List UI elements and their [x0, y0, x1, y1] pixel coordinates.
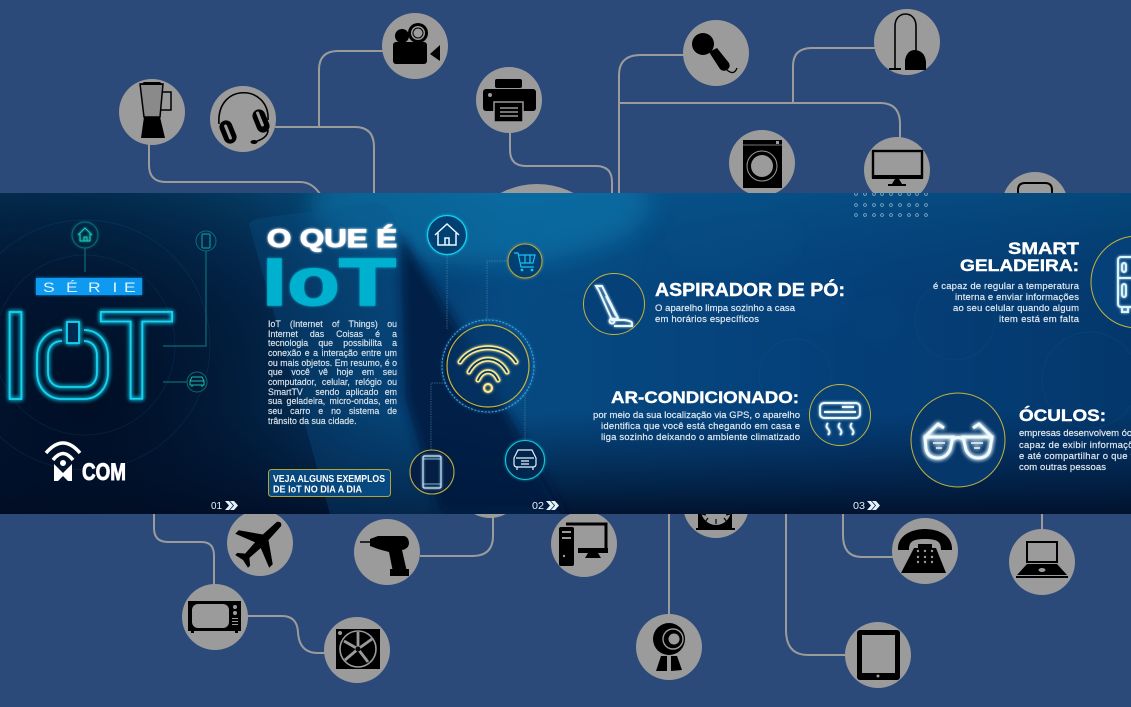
text: what is IoT: trânsito da sua cidade. [268, 416, 357, 426]
logo: VCOM [46, 443, 126, 486]
icon: fridge circle [1091, 236, 1131, 328]
icon: air conditioner circle [810, 384, 870, 446]
text: aspirador: O aparelho limpa sozinho a casa [655, 303, 796, 314]
text: aspirador: em horários específicos [655, 314, 759, 325]
world map [535, 200, 905, 345]
heading: IoT: I [262, 245, 286, 320]
page number 02 [532, 501, 559, 510]
heading: IoT: T [339, 245, 396, 320]
icon: partial top right [1002, 172, 1068, 238]
text: aspirador [655, 303, 796, 325]
icon: desktop computer [551, 511, 617, 577]
icon: webcam [636, 614, 702, 680]
decorative rings [0, 220, 1131, 470]
heading: óculos: ÓCULOS: [1019, 406, 1106, 425]
text: óculos: com outras pessoas [1019, 462, 1106, 473]
icon: tablet [845, 622, 911, 688]
icon: microphone [683, 20, 749, 86]
heading: aspirador: ASPIRADOR DE PÓ: [655, 279, 845, 300]
button: examples [268, 470, 390, 496]
page number 01 [211, 501, 238, 510]
icon: headset [210, 86, 276, 152]
decorative dot grid [855, 193, 927, 216]
icon: glasses circle [911, 393, 1005, 487]
text: what is IoT: IoT (Internet of Things) ou [268, 319, 397, 329]
icon: fan [324, 617, 390, 683]
icon: vacuum cleaner [874, 9, 940, 75]
text: ar-condicionado [593, 410, 800, 443]
hub connector lines [431, 255, 525, 450]
text: what is IoT: SmartTV sendo aplicado em [268, 387, 397, 397]
icon: car small [187, 372, 207, 392]
icon: vintage television [182, 584, 248, 650]
heading: smart geladeira: SMART [1008, 239, 1080, 258]
icon: cart circle [508, 244, 542, 278]
text: ar-condicionado: liga sozinho deixando o ambiente climatizado [601, 432, 800, 443]
neon IoT logo: T [98, 285, 175, 426]
icon: wifi hub [442, 320, 534, 412]
page number 03: 03 [853, 500, 865, 512]
phone silhouette [249, 203, 560, 514]
text: what is IoT [268, 319, 398, 426]
page number 01: 01 [211, 500, 222, 512]
text: what is IoT: computador, celular, relógio ou [268, 377, 397, 387]
icon: clock [683, 472, 749, 538]
icon: vacuum circle [584, 274, 644, 334]
icon: laptop [1009, 529, 1075, 595]
text: ar-condicionado: por meio da sua localização via GPS, o aparelho [593, 410, 800, 421]
heading: ar-condicionado: AR-CONDICIONADO: [611, 388, 799, 407]
heading: smart geladeira: GELADEIRA: [960, 256, 1079, 275]
text: what is IoT: seu carro e no sistema de [268, 406, 397, 416]
icon: home small [72, 222, 98, 248]
icon: airplane [225, 506, 297, 578]
text: smart geladeira: é capaz de regular a temperatura [933, 281, 1080, 292]
text: what is IoT: ou mais objetos. Em resumo, é o [268, 358, 397, 368]
icon: house circle [428, 216, 466, 254]
icon: car circle [506, 440, 544, 480]
text: smart geladeira: ao seu celular quando algum [953, 303, 1079, 314]
glow: top centre [304, 193, 652, 271]
text: smart geladeira: item está em falta [999, 314, 1080, 325]
text: smart geladeira [933, 281, 1080, 325]
label: série: SÉRIE [43, 279, 136, 296]
icon: telephone [892, 518, 958, 584]
icon: drill [354, 519, 420, 585]
left diagram lines [85, 248, 206, 382]
button: examples: VEJA ALGUNS EXEMPLOS [273, 474, 385, 485]
text: what is IoT: sua geladeira, micro-ondas, em [268, 396, 397, 406]
text: what is IoT: Internet das Coisas é a [268, 329, 397, 339]
panel: blue band [0, 193, 1131, 514]
text: óculos [1019, 428, 1131, 473]
icon: smartphone circle [410, 450, 454, 494]
icon: partial bottom centre [457, 452, 523, 518]
button: examples: DE IoT NO DIA A DIA [273, 484, 362, 496]
text: what is IoT: que você vê hoje em seu [268, 367, 397, 377]
text: what is IoT: conexão e a interação entre um [268, 348, 397, 358]
icon: monitor [864, 137, 930, 203]
icon: washing machine [729, 130, 795, 196]
icon: video camera [382, 13, 448, 79]
heading: smart geladeira [960, 242, 1079, 272]
page number 02: 02 [532, 500, 544, 512]
neon IoT logo [4, 307, 177, 404]
heading: IoT: o [288, 245, 340, 320]
heading: IoT [266, 256, 398, 308]
icon: printer [476, 67, 542, 133]
text: what is IoT: tecnologia que possibilita a [268, 338, 397, 348]
icon: blender [119, 79, 185, 145]
heading: o que é: O QUE É [267, 224, 397, 253]
text: smart geladeira: interna e enviar informações [955, 292, 1079, 303]
icon: phone small [196, 231, 216, 251]
phone dark side [400, 233, 565, 514]
icon: partial top centre [459, 184, 615, 340]
logo: VCOM: COM [82, 459, 126, 486]
page number 03 [853, 501, 880, 510]
connector lines [149, 48, 1042, 655]
text: ar-condicionado: identifica que você está chegando em casa e [601, 421, 800, 432]
